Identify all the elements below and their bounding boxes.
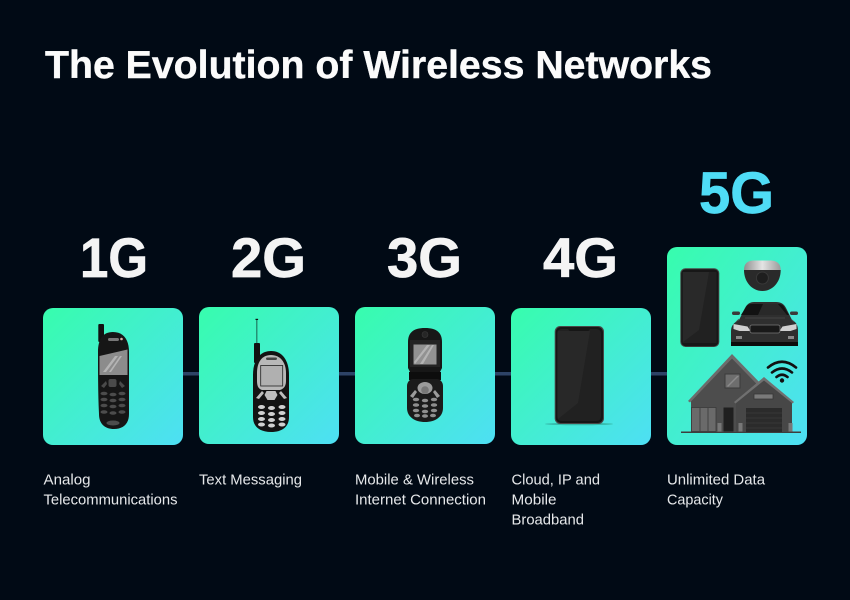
heading: 3G: 3G: [387, 226, 462, 289]
card: 3G: [355, 307, 495, 444]
caption: 5G: [667, 472, 766, 508]
card: 4G: [511, 308, 651, 445]
icon: analog phone: [98, 324, 129, 429]
caption: 4G: [512, 472, 600, 528]
icon: house: [681, 354, 801, 433]
card: 2G: [199, 307, 339, 444]
panel: 5G: [667, 161, 807, 445]
caption: 4G: Mobile: [512, 492, 556, 508]
caption: 3G: Internet Connection: [355, 492, 486, 508]
caption: 5G: Capacity: [667, 492, 724, 508]
card: 1G: [43, 308, 183, 445]
icon: car: [731, 302, 798, 346]
caption: 5G: Unlimited Data: [667, 472, 766, 488]
card: 5G: [667, 247, 807, 445]
heading: 4G: 4G: [543, 226, 618, 289]
panel: 4G: [511, 226, 651, 445]
icon: wifi: [768, 362, 796, 381]
caption: 2G: Text Messaging: [199, 472, 302, 488]
caption: 3G: [355, 472, 486, 508]
panel: 3G: [355, 226, 495, 444]
icon: security camera: [744, 260, 781, 291]
caption: 4G: Broadband: [512, 512, 584, 528]
panel: 1G: [43, 226, 183, 445]
icon: text messaging phone: [253, 319, 289, 432]
timeline connector line: [183, 372, 667, 376]
caption: 1G: Analog: [44, 472, 90, 488]
heading: 2G: 2G: [231, 226, 306, 289]
heading: 5G: 5G: [699, 161, 774, 226]
icon: smartphone: [680, 268, 719, 347]
caption: 3G: Mobile & Wireless: [355, 472, 474, 488]
caption: 1G: Telecommunications: [44, 492, 178, 508]
icon: flip phone: [407, 328, 443, 422]
heading: 1G: 1G: [80, 226, 148, 289]
panel: 2G: [199, 226, 339, 444]
title: The Evolution of Wireless Networks: [45, 44, 712, 87]
caption: 4G: Cloud, IP and: [512, 472, 600, 488]
icon: smartphone: [545, 326, 613, 425]
caption: 1G: [44, 472, 178, 508]
